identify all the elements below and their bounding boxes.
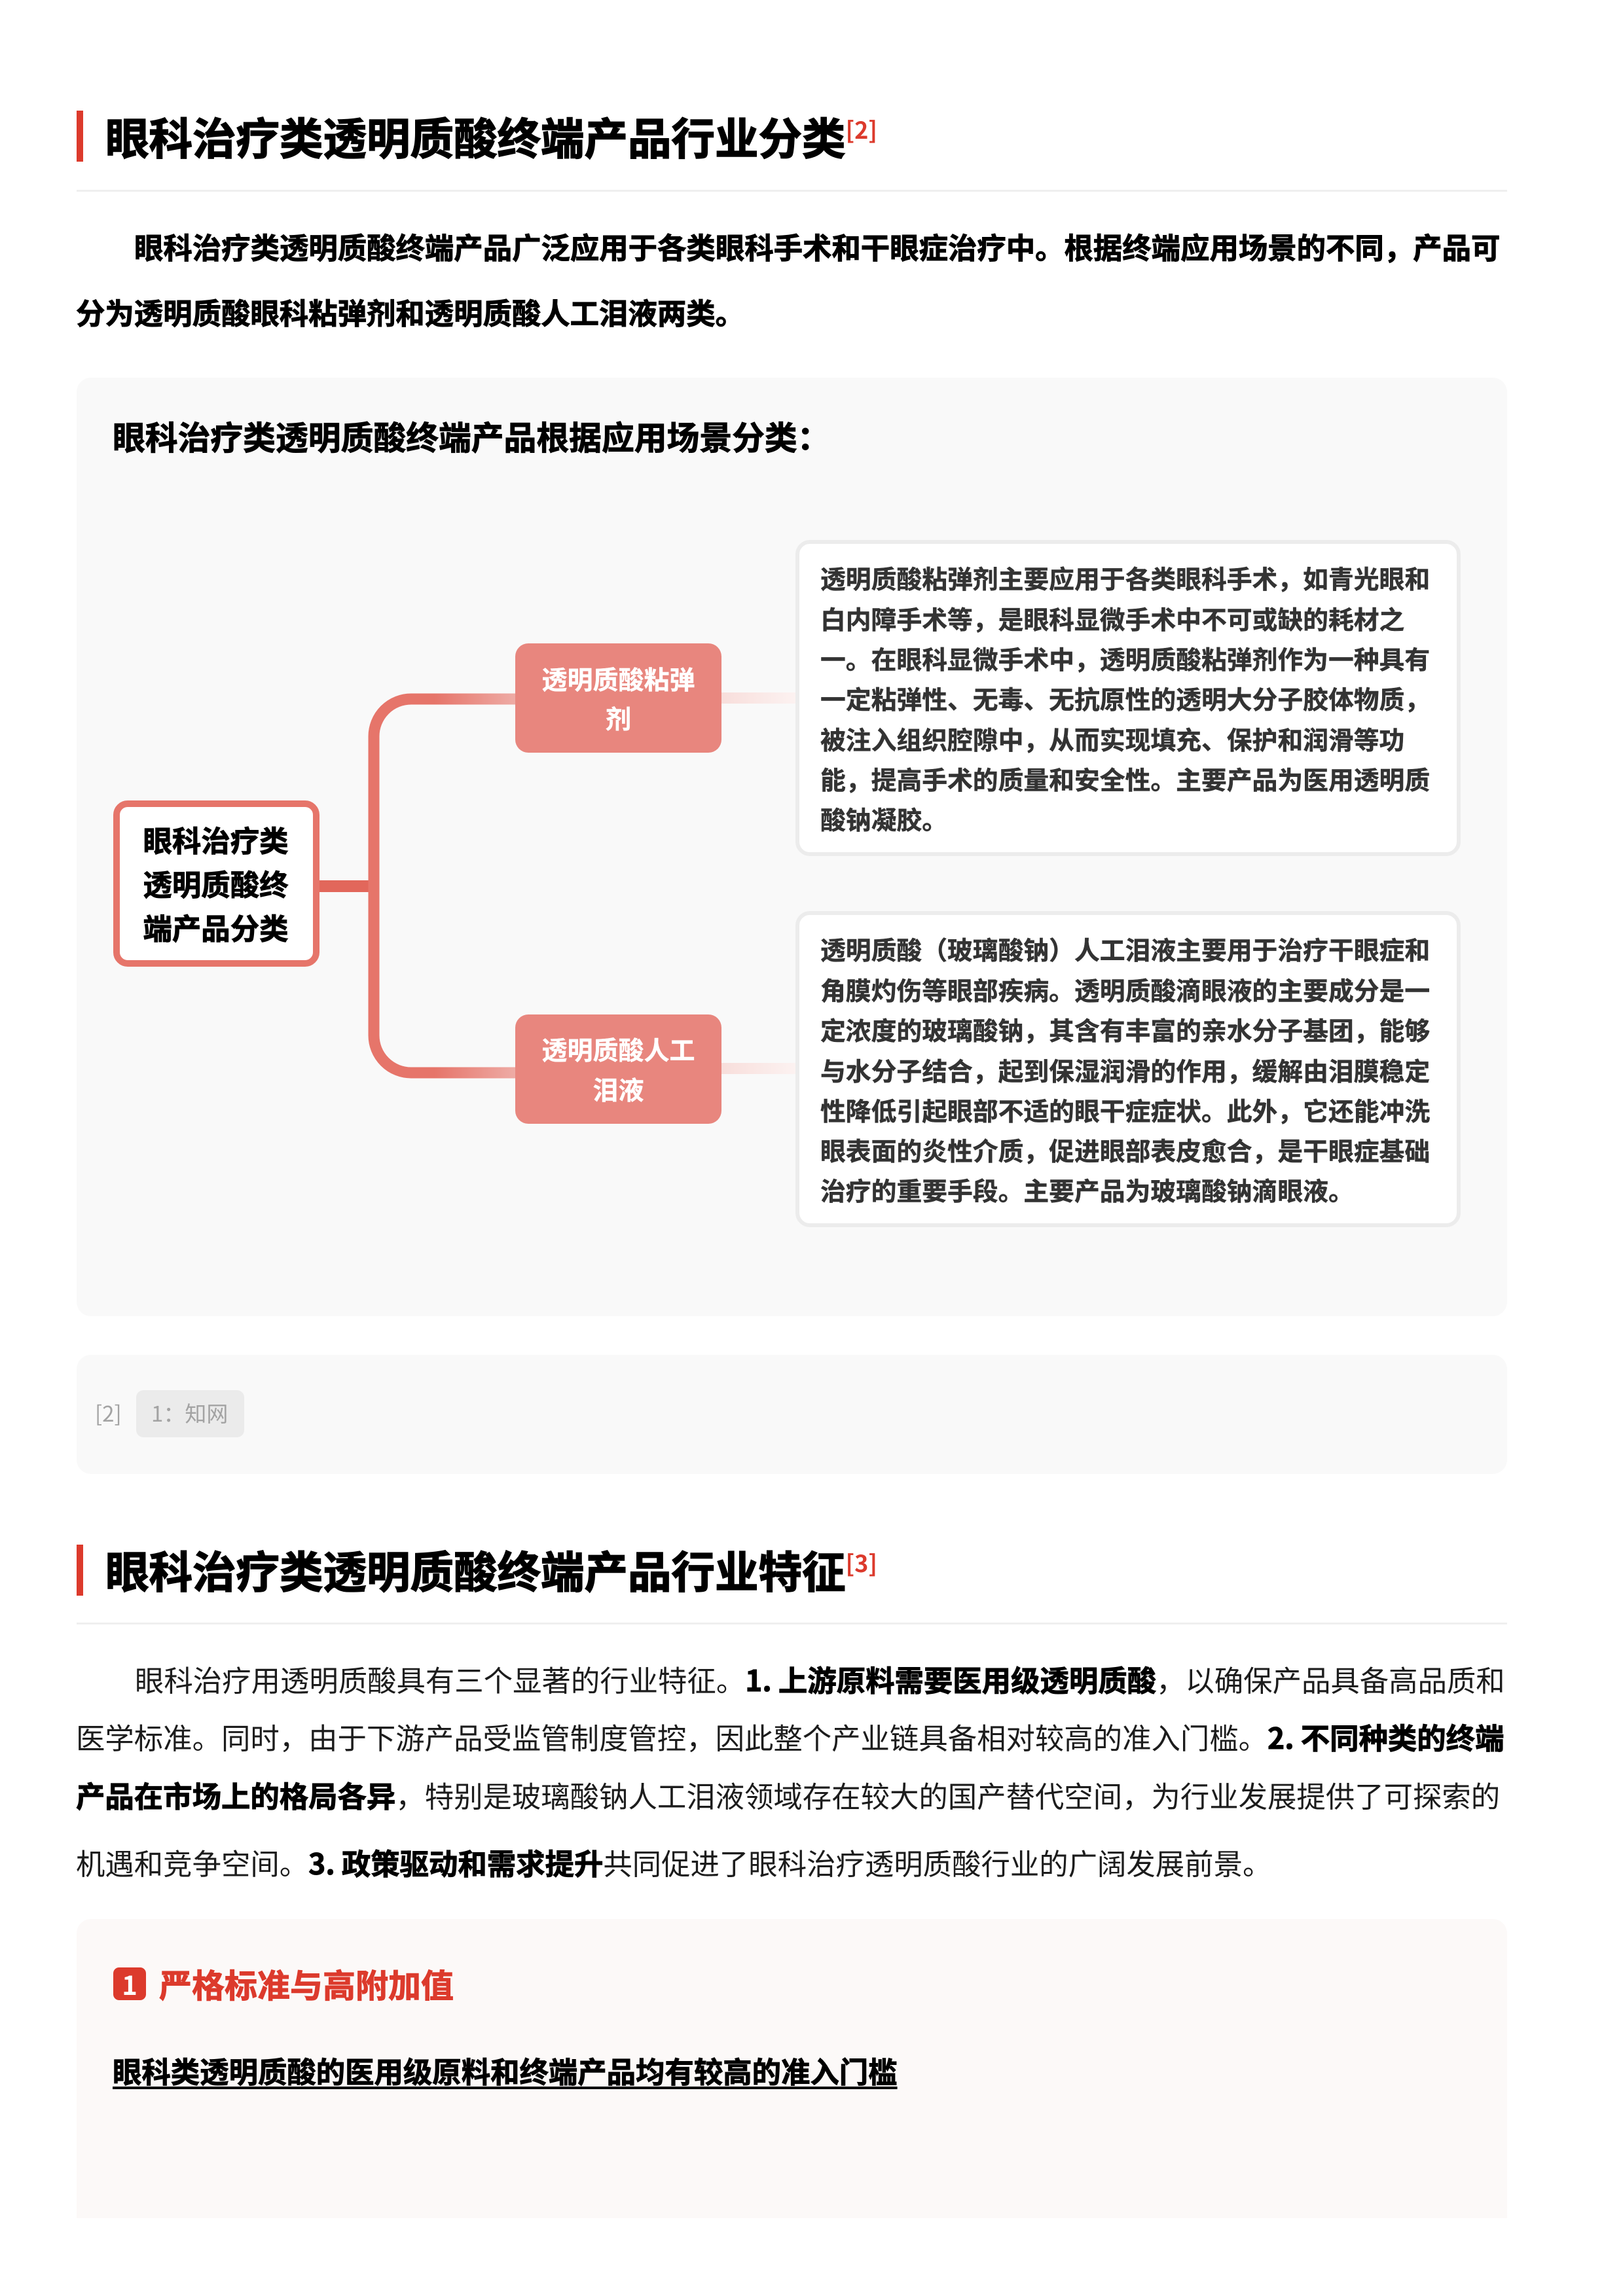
mind map connectors [319,692,795,1079]
section 1 heading [77,105,1507,192]
text box: artificial tears description: 透明质酸（玻璃酸钠）人工泪液主要用于治疗干眼症和 [820,931,1430,967]
source chip: 1：知网 [151,1397,228,1428]
section 1 intro paragraph: 分为透明质酸眼科粘弹剂和透明质酸人工泪液两类。 [76,290,744,332]
underlined subheading: 眼科类透明质酸的医用级原料和终端产品均有较高的准入门槛 [113,2049,898,2091]
root node text: 端产品分类 [143,905,288,948]
root node text [143,817,289,948]
text box: viscoelastic description: 酸钠凝胶。 [820,800,947,837]
heading title text: 眼科治疗类透明质酸终端产品行业分类[2] [105,105,877,168]
text box: viscoelastic description [795,540,1461,856]
text box: artificial tears description: 眼表面的炎性介质，促进眼部表皮愈合，是干眼症基础 [820,1132,1430,1168]
text box: viscoelastic description: 一定粘弹性、无毒、无抗原性的透明大分子胶体物质， [820,680,1430,717]
section 2 paragraph [76,1657,1505,1883]
text box: viscoelastic description: 透明质酸粘弹剂主要应用于各类眼科手术，如青光眼和 [820,560,1430,596]
number badge [113,1967,146,2000]
heading accent bar [77,1545,83,1596]
text box: artificial tears description: 与水分子结合，起到保湿润滑的作用，缓解由泪膜稳定 [820,1052,1430,1088]
panel: strict standards and high added value [77,1919,1507,2218]
source chip [136,1390,244,1437]
source panel [77,1355,1507,1474]
section 1 intro paragraph [76,224,1500,332]
number badge: 1 [122,1965,137,2003]
text box: viscoelastic description: 被注入组织腔隙中，从而实现填充、保护和润滑等功 [820,721,1404,757]
section 1 intro paragraph: 眼科治疗类透明质酸终端产品广泛应用于各类眼科手术和干眼症治疗中。根据终端应用场景的不同，产品可 [134,224,1500,267]
panel: application scenario classification [77,378,1507,1316]
branch node: artificial tears [515,1014,721,1124]
text box: artificial tears description [795,911,1461,1227]
text box: artificial tears description: 角膜灼伤等眼部疾病。透明质酸滴眼液的主要成分是一 [820,971,1430,1008]
heading accent bar [77,111,83,162]
card heading: 严格标准与高附加值 [159,1960,454,2007]
branch node: viscoelastic: 透明质酸粘弹 [541,660,695,697]
section 2 paragraph: 产品在市场上的格局各异，特别是玻璃酸钠人工泪液领域存在较大的国产替代空间，为行业发展提供了可探索的 [76,1773,1500,1816]
branch node: artificial tears: 泪液 [593,1071,644,1107]
root node [113,800,319,967]
branch node: viscoelastic: 剂 [606,700,631,736]
source reference number: [2] [95,1397,122,1428]
section 2 heading [77,1538,1507,1624]
root node text: 透明质酸终 [143,861,288,904]
text box: artificial tears description: 性降低引起眼部不适的眼干症症状。此外，它还能冲洗 [820,1092,1430,1128]
text box: artificial tears description: 治疗的重要手段。主要产品为玻璃酸钠滴眼液。 [820,1172,1354,1208]
root node text: 眼科治疗类 [143,817,288,860]
branch node: artificial tears: 透明质酸人工 [541,1031,695,1067]
text box: viscoelastic description: 一。在眼科显微手术中，透明质酸粘弹剂作为一种具有 [820,640,1430,677]
branch node: viscoelastic [515,643,721,753]
section 2 paragraph: 机遇和竞争空间。3. 政策驱动和需求提升共同促进了眼科治疗透明质酸行业的广阔发展前景。 [76,1840,1271,1883]
heading title text: 眼科治疗类透明质酸终端产品行业特征[3] [105,1538,877,1601]
section 2 paragraph: 眼科治疗用透明质酸具有三个显著的行业特征。1. 上游原料需要医用级透明质酸，以确保产品具备高品质和 [135,1657,1505,1700]
panel title: 眼科治疗类透明质酸终端产品根据应用场景分类： [113,412,830,459]
text box: viscoelastic description: 白内障手术等，是眼科显微手术中不可或缺的耗材之 [820,600,1404,637]
text box: artificial tears description: 定浓度的玻璃酸钠，其含有丰富的亲水分子基团，能够 [820,1011,1430,1048]
text box: viscoelastic description: 能，提高手术的质量和安全性。主要产品为医用透明质 [820,761,1430,797]
section 2 paragraph: 医学标准。同时，由于下游产品受监管制度管控，因此整个产业链具备相对较高的准入门槛。2. 不同种类的终端 [76,1715,1504,1757]
